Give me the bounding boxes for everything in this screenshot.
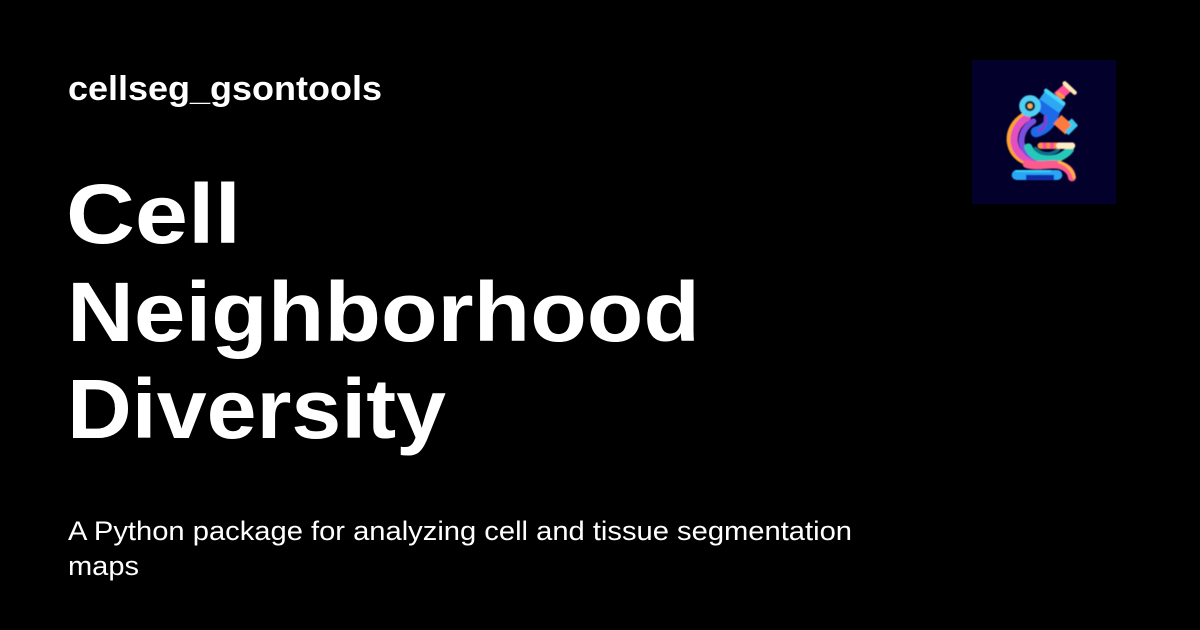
- curved stage support: [1028, 147, 1070, 159]
- focus knob: [1022, 98, 1038, 114]
- description: maps: [68, 551, 139, 581]
- title: [66, 167, 700, 456]
- title: Neighborhood: [67, 265, 700, 359]
- stage: [1041, 136, 1072, 155]
- objective: [1057, 119, 1069, 130]
- description: A Python package for analyzing cell and tissue segmentation: [68, 516, 852, 546]
- icon background: [972, 60, 1116, 204]
- eyepiece: [1057, 88, 1067, 97]
- foot: [1017, 160, 1057, 190]
- site name: cellseg_gsontools: [68, 70, 382, 108]
- description: [68, 516, 852, 581]
- tube body: [1041, 97, 1061, 111]
- icon: microscope logo: [972, 60, 1116, 204]
- title: Cell: [66, 167, 241, 261]
- arm outer bands: [1009, 115, 1045, 165]
- base sweep: [1027, 164, 1072, 177]
- title: Diversity: [67, 362, 446, 456]
